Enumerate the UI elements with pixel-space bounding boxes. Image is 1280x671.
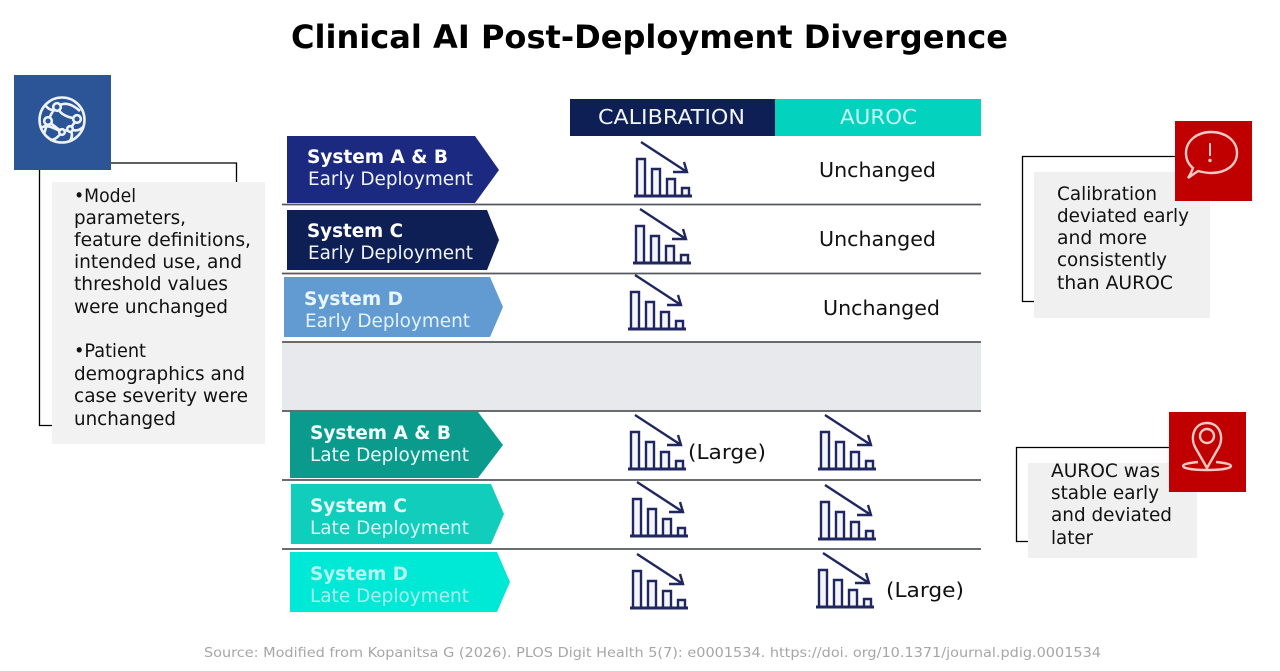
table header: calibration: CALIBRATION: [598, 105, 745, 129]
panel: left unchanged factors: [14, 75, 265, 444]
icon: declining bars, C early calibration: [633, 209, 691, 263]
text block: unchanged factors: •Patient: [74, 341, 146, 362]
panel: calibration callout: [1022, 121, 1252, 318]
text block: unchanged factors: threshold values: [74, 274, 228, 295]
text block: AUROC finding: stable early: [1051, 483, 1159, 504]
row label: System D early: Early Deployment: [305, 311, 470, 332]
text block: unchanged factors: •Model: [74, 186, 136, 207]
text block: calibration finding: [1034, 172, 1210, 318]
value: A&B late calibration large: (Large): [688, 440, 766, 464]
text block: unchanged factors: were unchanged: [74, 297, 228, 318]
icon: map pin: [1169, 412, 1246, 492]
icon: network globe: [14, 75, 111, 170]
icon: alert speech bubble: [1175, 121, 1252, 201]
row label: System C late: [291, 484, 504, 544]
row label: System A & B early: System A & B: [307, 147, 448, 168]
middle grey band: [282, 342, 981, 411]
row label: System A & B early: [287, 136, 499, 203]
row label: System C early: System C: [307, 221, 403, 242]
text block: unchanged factors: unchanged: [74, 409, 176, 430]
text block: calibration finding: than AUROC: [1057, 273, 1173, 294]
row label: System C late: Late Deployment: [310, 518, 469, 539]
row label: System D late: [290, 552, 510, 612]
text block: calibration finding: and more: [1057, 228, 1147, 249]
row label: System A & B early: Early Deployment: [308, 169, 473, 190]
row label: System C early: [287, 210, 499, 270]
source note: Source: Modified from Kopanitsa G (2026). PLOS Digit Health 5(7): e0001534. https://doi. org/10.1371/journal.pdig.0001534: [204, 645, 1101, 661]
row label: System D early: System D: [304, 289, 403, 310]
value: D early AUROC: Unchanged: [823, 296, 940, 320]
value: D late AUROC large: (Large): [886, 578, 964, 602]
panel: AUROC callout: [1016, 412, 1246, 558]
row label: System D late: System D: [310, 564, 408, 585]
panel: comparison table: [282, 99, 981, 612]
row label: System A & B late: [290, 412, 503, 478]
table header: AUROC: AUROC: [840, 105, 917, 129]
text block: unchanged factors: [52, 182, 265, 444]
text block: calibration finding: deviated early: [1057, 206, 1189, 227]
icon: declining bars, A&B late calibration: [628, 415, 686, 469]
text block: AUROC finding: [1028, 461, 1197, 558]
row label: System A & B late: Late Deployment: [310, 445, 469, 466]
title: Clinical AI Post-Deployment Divergence: [291, 18, 1008, 56]
row label: System C early: Early Deployment: [308, 243, 473, 264]
icon: declining bars, C late calibration: [630, 482, 688, 536]
table header: AUROC: [775, 99, 981, 136]
text block: AUROC finding: AUROC was: [1051, 461, 1160, 482]
text block: AUROC finding: and deviated: [1051, 505, 1172, 526]
row label: System A & B late: System A & B: [310, 423, 451, 444]
text block: unchanged factors: parameters,: [74, 208, 186, 229]
value: C early AUROC: Unchanged: [819, 227, 936, 251]
value: A&B early AUROC: Unchanged: [819, 158, 936, 182]
icon: declining bars, A&B late AUROC: [818, 415, 876, 469]
text block: unchanged factors: demographics and: [74, 364, 245, 385]
text block: AUROC finding: later: [1051, 528, 1093, 549]
row label: System D early: [284, 277, 503, 337]
table header: calibration: [570, 99, 775, 136]
text block: unchanged factors: case severity were: [74, 386, 248, 407]
text block: unchanged factors: feature definitions,: [74, 230, 251, 251]
text block: unchanged factors: intended use, and: [74, 252, 242, 273]
row label: System C late: System C: [310, 496, 407, 517]
text block: calibration finding: consistently: [1057, 250, 1167, 271]
icon: declining bars, A&B early calibration: [634, 142, 692, 196]
row label: System D late: Late Deployment: [310, 586, 469, 607]
text block: calibration finding: Calibration: [1057, 184, 1157, 205]
icon: declining bars, D late calibration: [630, 554, 688, 608]
icon: declining bars, D late AUROC: [816, 553, 874, 607]
icon: declining bars, D early calibration: [628, 275, 686, 329]
icon: declining bars, C late AUROC: [818, 485, 876, 539]
